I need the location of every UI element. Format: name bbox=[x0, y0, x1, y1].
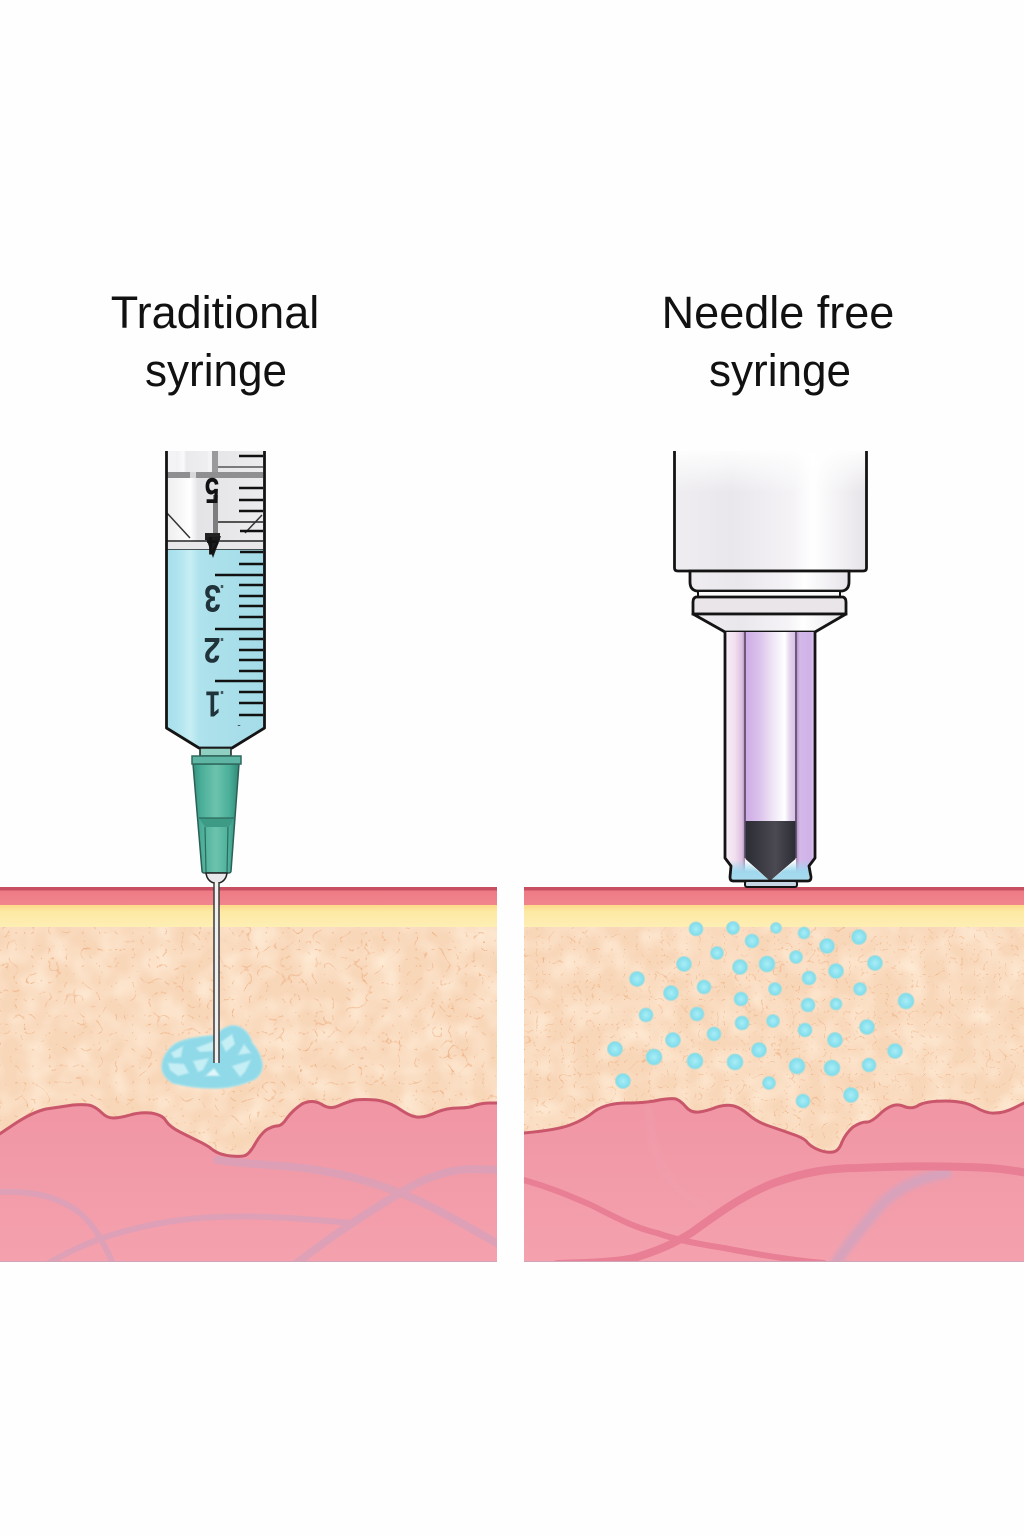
heading: Traditional syringe: syringe bbox=[145, 345, 287, 396]
cone bbox=[693, 614, 846, 632]
syringe barrel: empty upper part bbox=[167, 451, 264, 549]
inner tube lines bbox=[745, 632, 796, 858]
skin layer: epidermis bbox=[524, 890, 1024, 905]
heading: Needle free syringe: Needle free bbox=[662, 287, 894, 338]
heading: Traditional syringe: Traditional bbox=[111, 287, 319, 338]
needle base bbox=[206, 873, 227, 883]
plunger: inner detail bbox=[167, 451, 263, 558]
medicine glow at nozzle bbox=[731, 860, 809, 881]
syringe barrel: outline bbox=[166, 451, 264, 748]
skin layer: surface line bbox=[524, 887, 1024, 890]
scale number 1: 1 bbox=[206, 684, 220, 725]
bottom edge line bbox=[0, 1261, 497, 1262]
scale number 5: 5 bbox=[205, 470, 219, 510]
skin layer: deep tissue bbox=[515, 1099, 1024, 1270]
skin layer: epidermis bbox=[0, 890, 497, 905]
heading: Traditional syringe bbox=[111, 287, 319, 396]
collar bbox=[690, 571, 849, 591]
graduation ticks bbox=[215, 456, 263, 715]
nozzle tip bbox=[745, 881, 797, 887]
heading: Needle free syringe: syringe bbox=[709, 345, 851, 396]
bottom edge line bbox=[524, 1261, 1024, 1262]
lavender blood vessel bbox=[834, 1172, 951, 1266]
skin layer: surface line bbox=[0, 887, 497, 890]
tube right wall bbox=[796, 632, 815, 880]
tube outline bbox=[725, 632, 815, 881]
traditional syringe bbox=[166, 451, 264, 1063]
needle hub bbox=[192, 756, 241, 873]
skin layer: deep tissue bbox=[0, 1100, 505, 1270]
scale number 4: 4 bbox=[207, 532, 219, 559]
syringe barrel: liquid bbox=[167, 549, 264, 748]
skin layer: fat band bbox=[524, 905, 1024, 927]
small scale marks bbox=[222, 585, 239, 726]
device body bbox=[674, 451, 866, 571]
panel: skin cross-section, needle free injection bbox=[515, 887, 1024, 1270]
dispersed medicine droplets bbox=[608, 922, 914, 1108]
device body outline bbox=[674, 451, 866, 571]
blood vessels: left panel bbox=[0, 1160, 500, 1266]
skin layer: fat band bbox=[0, 905, 497, 927]
tube centre bbox=[745, 632, 796, 822]
scale number 3: 3 bbox=[204, 577, 221, 619]
heading: Needle free syringe bbox=[662, 287, 894, 396]
device body shine bbox=[676, 451, 866, 521]
black piston tip bbox=[746, 821, 796, 881]
neck groove bbox=[698, 591, 840, 597]
tube left wall bbox=[725, 632, 745, 880]
flange ring bbox=[693, 597, 846, 614]
scale number 2: 2 bbox=[204, 631, 220, 670]
panel: skin cross-section, traditional injection bbox=[0, 887, 505, 1270]
faint vessel shadows bbox=[648, 1105, 710, 1207]
needle shaft bbox=[214, 882, 219, 1063]
blood vessels: right panel bbox=[520, 1166, 1024, 1264]
syringe neck bbox=[200, 748, 231, 756]
drug deposit: injected blob bbox=[162, 1026, 262, 1088]
needle free syringe bbox=[674, 451, 866, 887]
